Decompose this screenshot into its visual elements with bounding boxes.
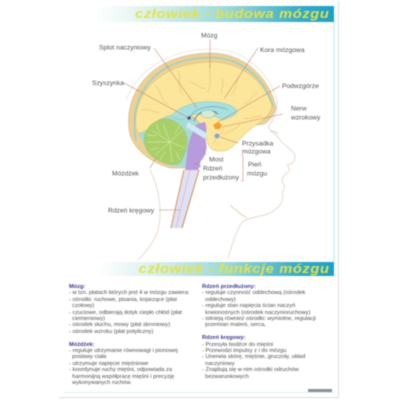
- skull: [128, 53, 276, 168]
- labels: Mózg: [201, 32, 218, 40]
- labels: mózgu: [247, 170, 267, 178]
- text block: left column: Mózg: - w tzn. płatach których jest 4 w mózgu zawiera: - ośrodki: ruchowe, pisania, kojarzące (płat czołowy) - czuciowe, odbierają dotyk ciepło chłód (płat ciemieniowy) - ośrodek słuchu, mowy (płat skroniowy) - ośrodek wzroku (płat potyliczny) Móżdżek: - reguluje utrzymanie równowagi i pionowej postawy ciała - utrzymuje napięcie mięśniowe - koordynuje ruchy mięśni, odpowiada za harmonijną współpracę mięśni i precyzję wykonywanych ruchów.: [69, 284, 189, 386]
- hypothalamus: [213, 122, 222, 129]
- cerebrum: [136, 62, 272, 151]
- text block: right column: Rdzeń przedłużony: - reguluje czynność oddechową (ośrodek oddechowy) - reguluje stan napięcia ścian naczyń krwionośnych (ośrodek naczynioruchowy) - istnieją również ośrodki: wymiotne, regulacji przemian materii, serca, Rdzeń kręgowy: - Przesyła bodźce do mięśni - Przewodzi impulsy z i do mózgu - Unerwia skórę, mięśnie, gruczoły, układ naczyniowy - Znajdują się w nim ośrodki odruchów bezwarunkowych: [202, 284, 316, 380]
- labels: [92, 32, 321, 214]
- labels: Rdzeń: [203, 166, 223, 172]
- pituitary gland: [214, 134, 220, 138]
- publisher logo: [308, 389, 332, 392]
- right accent edge: [333, 22, 335, 262]
- head silhouette: [126, 49, 295, 260]
- meninges: [134, 57, 273, 140]
- labels: Splot naczyniowy: [99, 44, 151, 52]
- midbrain light band: [186, 122, 208, 139]
- labels: Pień: [248, 162, 262, 168]
- corpus callosum: [172, 102, 237, 121]
- labels: wzrokowy: [290, 114, 321, 122]
- cerebellum: [144, 119, 187, 164]
- labels: przedłużony: [203, 174, 240, 182]
- labels: Most: [209, 156, 224, 164]
- brain folds: [141, 64, 262, 144]
- labels: mózgowa: [242, 148, 271, 156]
- lower panel accent edge: [64, 392, 334, 393]
- title: funkcje: człowiek - funkcje mózgu: [138, 262, 329, 276]
- brain stem: [185, 122, 207, 171]
- labels: Rdzeń kręgowy: [108, 208, 155, 214]
- labels: Móżdżek: [112, 170, 139, 178]
- labels: Nerw: [291, 106, 307, 112]
- labels: Szyszynka: [92, 80, 124, 87]
- fluid behind cerebellum: [139, 112, 205, 168]
- diagram: brain anatomy: [92, 32, 321, 260]
- title: budowa: człowiek - budowa mózgu: [135, 7, 329, 21]
- labels: Podwzgórze: [282, 83, 319, 90]
- labels: Kora mózgowa: [260, 47, 305, 54]
- spinal cord: [171, 170, 199, 228]
- pineal gland: [187, 116, 191, 120]
- labels: Przysadka: [242, 140, 274, 148]
- poster frame: [59, 1, 339, 398]
- leader lines: [124, 39, 283, 210]
